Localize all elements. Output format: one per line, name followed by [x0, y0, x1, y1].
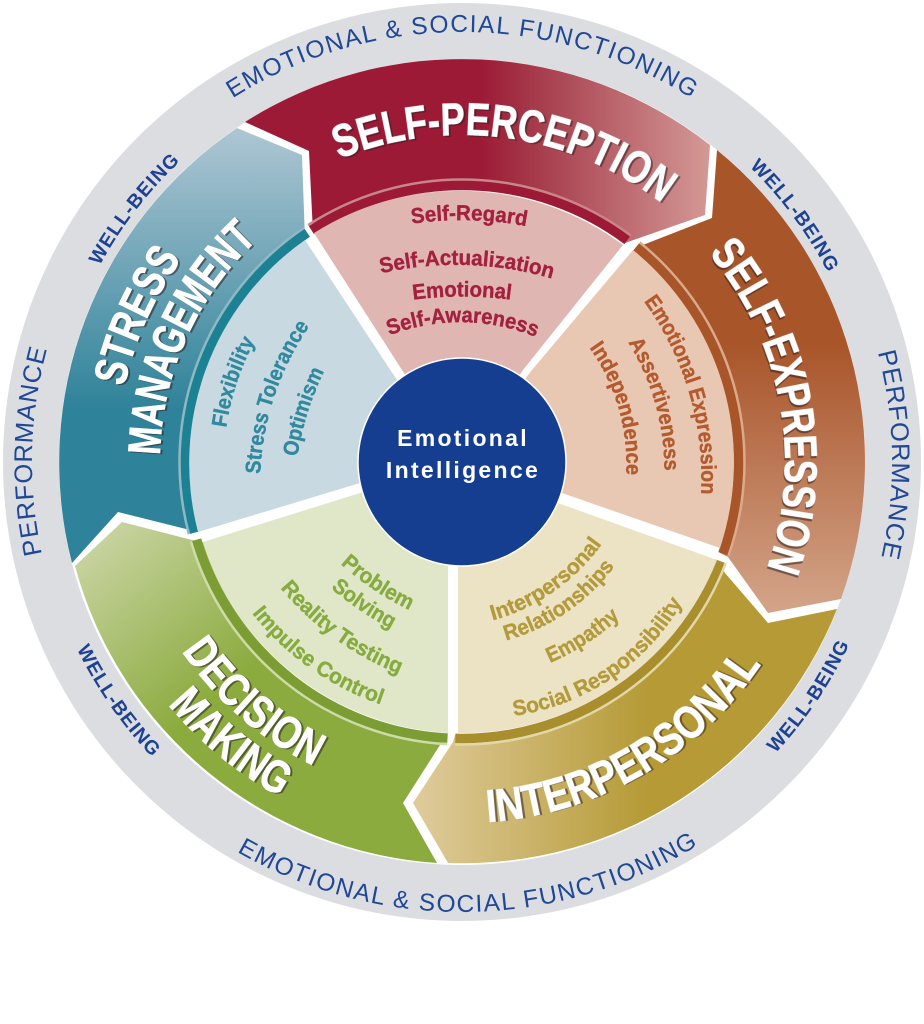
- heading: self-perception: SELF-PERCEPTION: [332, 102, 681, 204]
- label: emotional and social functioning, top: EMOTIONAL & SOCIAL FUNCTIONING: [226, 14, 696, 98]
- decision making band: [75, 522, 448, 863]
- panel: interpersonal: [413, 503, 837, 864]
- self-perception wedge: [314, 191, 623, 462]
- list: self-perception skills: Self-Actualization: [380, 250, 554, 278]
- interpersonal band: [413, 560, 837, 863]
- stress management band: [59, 128, 305, 563]
- interpersonal wedge: [458, 462, 717, 733]
- label: well-being, bottom right: WELL-BEING: [766, 641, 848, 751]
- center circle: emotional intelligence: Emotional: [397, 425, 529, 451]
- heading: stress management: STRESS: [95, 246, 180, 386]
- list: interpersonal skills: [490, 536, 682, 716]
- stress management ring: [117, 117, 807, 807]
- list: self-expression skills: Independence: [590, 340, 639, 474]
- list: decision making skills: Problem: [341, 553, 412, 610]
- list: self-perception skills: Emotional: [412, 280, 512, 300]
- list: stress management skills: Optimism: [284, 368, 324, 455]
- label: well-being, bottom left: WELL-BEING: [78, 642, 159, 755]
- decision making wedge: [203, 462, 462, 733]
- interpersonal ring: [97, 97, 827, 827]
- list: interpersonal skills: Empathy: [544, 608, 618, 663]
- self-expression wedge: [462, 250, 734, 548]
- self-perception band: [245, 59, 710, 243]
- list: interpersonal skills: Interpersonal: [490, 536, 602, 620]
- heading: decision making: DECISION: [182, 634, 329, 766]
- center circle: emotional intelligence: [358, 358, 566, 566]
- panel: stress management: [59, 128, 397, 563]
- label: emotional and social functioning, bottom: EMOTIONAL & SOCIAL FUNCTIONING: [238, 834, 695, 912]
- self-expression band: [635, 150, 865, 613]
- list: decision making skills: Impulse Control: [252, 604, 385, 704]
- self-expression ring: [65, 65, 859, 859]
- heading: decision making: MAKING: [169, 685, 292, 794]
- list: self-perception skills: Self-Regard: [411, 204, 528, 226]
- label: performance, left: PERFORMANCE: [14, 346, 47, 556]
- self-perception ring: [71, 71, 853, 853]
- label: well-being, top left: WELL-BEING: [88, 154, 178, 263]
- list: stress management skills: Stress Tolerance: [245, 322, 308, 474]
- list: self-perception skills: [380, 204, 554, 336]
- heading: self-expression: SELF-EXPRESSION: [712, 238, 818, 578]
- center circle: emotional intelligence: Intelligence: [386, 457, 540, 483]
- list: self-expression skills: Emotional Expression: [644, 294, 717, 494]
- heading: interpersonal: INTERPERSONAL: [486, 658, 764, 822]
- list: stress management skills: [212, 322, 324, 474]
- decision making ring: [165, 165, 759, 759]
- heading: stress management: MANAGEMENT: [128, 217, 254, 454]
- label: well-being, top right: WELL-BEING: [752, 157, 838, 270]
- stress management wedge: [189, 240, 462, 532]
- panel: self-perception: [245, 59, 710, 374]
- label: performance, right: PERFORMANCE: [878, 350, 910, 560]
- list: decision making skills: Reality Testing: [281, 579, 402, 676]
- list: self-expression skills: [590, 294, 717, 494]
- panel: decision making: [75, 492, 448, 863]
- list: stress management skills: Flexibility: [212, 336, 256, 427]
- list: decision making skills: Solving: [332, 578, 396, 631]
- list: interpersonal skills: Relationships: [502, 561, 613, 640]
- panel: self-expression: [526, 150, 865, 613]
- list: self-perception skills: Self-Awareness: [386, 308, 538, 336]
- list: self-expression skills: Assertiveness: [628, 340, 676, 470]
- list: interpersonal skills: Social Responsibility: [513, 596, 682, 716]
- list: decision making skills: [252, 553, 412, 704]
